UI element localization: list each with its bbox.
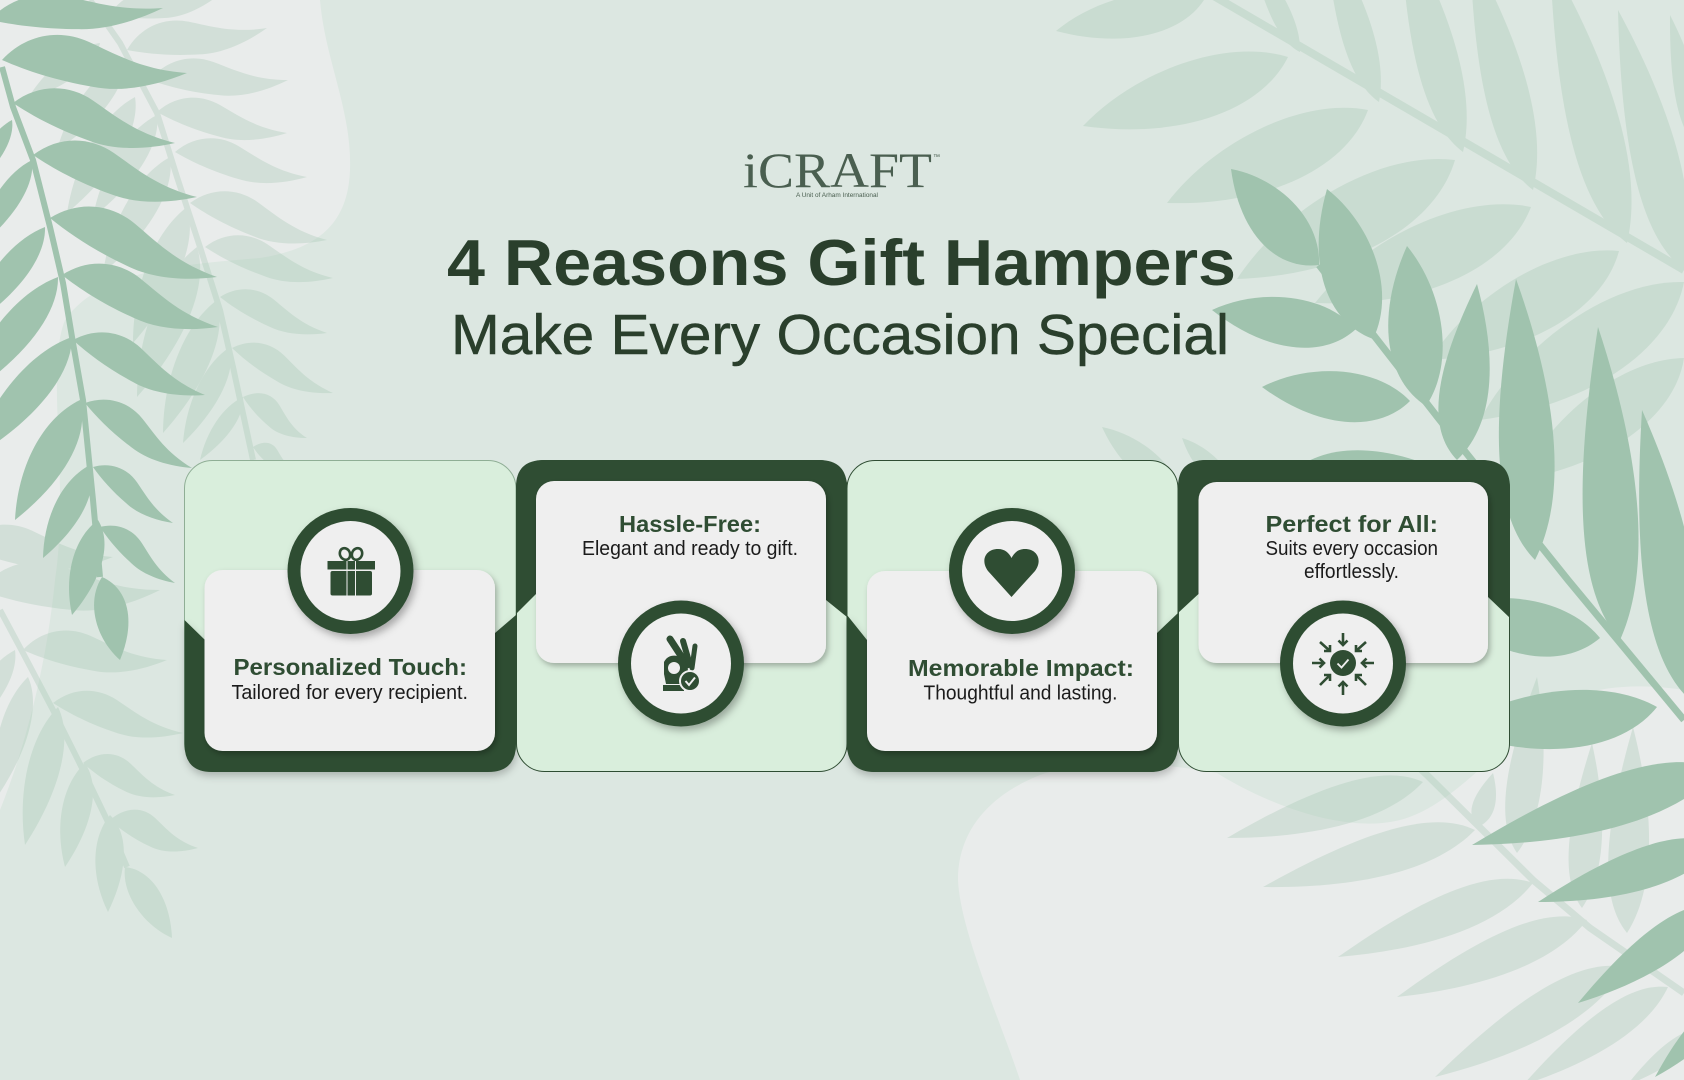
panel: memorable impact bbox=[847, 460, 1178, 772]
text: personalized touch: Personalized Touch: bbox=[234, 654, 467, 680]
panel: personalized touch bbox=[184, 460, 516, 772]
faint fern: lower left bbox=[0, 521, 204, 945]
text: hassle-free: Hassle-Free: bbox=[619, 511, 761, 537]
text: perfect for all: Suits every occasion bbox=[1266, 538, 1438, 560]
dark branch: right bbox=[1209, 153, 1684, 1080]
icon: gift bbox=[288, 508, 414, 634]
title: Make Every Occasion Special bbox=[451, 303, 1229, 367]
dark fern: left bbox=[0, 0, 226, 663]
title bbox=[447, 226, 1236, 367]
logo: A Unit of Arham International bbox=[796, 192, 879, 199]
icon: ok hand bbox=[618, 600, 744, 726]
text: perfect for all: effortlessly. bbox=[1304, 561, 1399, 583]
icon: focus arrows with check bbox=[1280, 600, 1406, 726]
logo: ™ bbox=[933, 154, 940, 161]
text: perfect for all: Perfect for All: bbox=[1266, 511, 1438, 537]
faint fern: top right bbox=[1052, 0, 1684, 505]
text: personalized touch bbox=[232, 654, 468, 704]
faint fern: bottom right bbox=[1221, 675, 1684, 1080]
background blob: bottom right bbox=[958, 686, 1684, 1080]
text: memorable impact: Thoughtful and lasting. bbox=[924, 682, 1118, 704]
icon: heart bbox=[949, 508, 1075, 634]
logo: iCRAFT bbox=[743, 142, 932, 198]
text: memorable impact bbox=[908, 655, 1134, 704]
text: hassle-free: Elegant and ready to gift. bbox=[582, 538, 798, 560]
text: personalized touch: Tailored for every recipient. bbox=[232, 682, 468, 704]
background blob: top left bbox=[0, 0, 350, 810]
panel: perfect for all bbox=[1178, 460, 1510, 772]
text: hassle-free bbox=[582, 511, 798, 560]
text: perfect for all bbox=[1266, 511, 1438, 583]
title: 4 Reasons Gift Hampers bbox=[447, 226, 1236, 299]
panel: hassle-free bbox=[516, 460, 847, 772]
faint fern: top left bbox=[21, 0, 340, 477]
text: memorable impact: Memorable Impact: bbox=[908, 655, 1134, 681]
